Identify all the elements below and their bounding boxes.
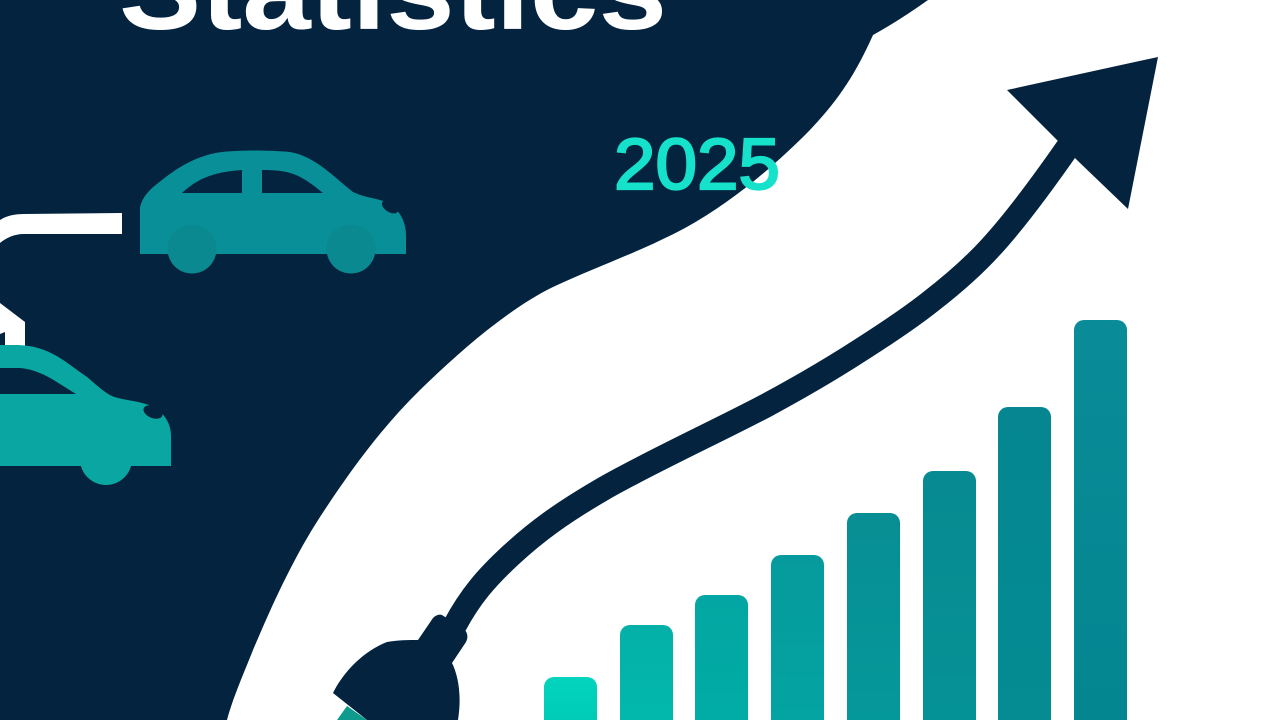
cable notch (0, 332, 5, 346)
icon: upper car (140, 150, 406, 274)
bar 5 (847, 513, 900, 720)
bar chart (544, 320, 1127, 720)
car wheels (168, 224, 376, 274)
bar 4 (771, 555, 824, 720)
bar 2 (620, 625, 673, 720)
car window (0, 368, 76, 394)
bar 1 (544, 677, 597, 720)
icon: lower car (0, 345, 171, 485)
arrow head (1007, 57, 1158, 209)
plug prong (337, 706, 367, 720)
car headlight (380, 198, 400, 216)
car headlight (141, 403, 165, 421)
charging cable (0, 213, 122, 346)
bar 6 (923, 471, 976, 720)
year label: 2025: 2025 (614, 125, 780, 205)
bar 7 (998, 407, 1051, 720)
car windows (182, 170, 323, 193)
rising arrow shaft (455, 147, 1068, 625)
bar 3 (695, 595, 748, 720)
plug body (333, 615, 467, 720)
bar 8 (1074, 320, 1127, 720)
car wheel (80, 433, 132, 485)
